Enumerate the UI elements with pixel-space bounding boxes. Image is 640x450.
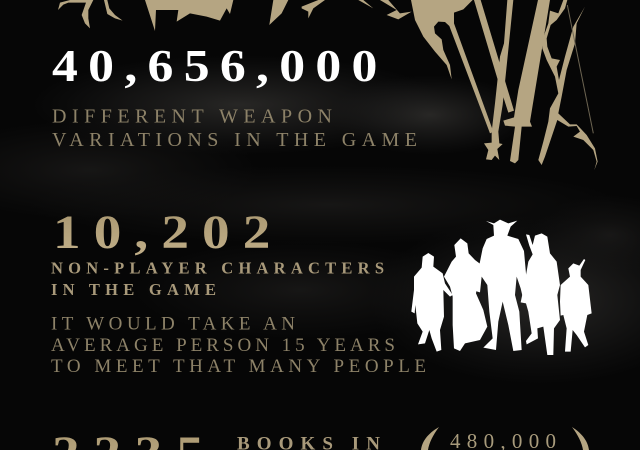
figure: woman in long dress bbox=[444, 238, 487, 351]
stat: weapon variations bbox=[52, 42, 417, 151]
left bracket bbox=[421, 427, 439, 450]
caption: fifteen years to meet them: IT WOULD TAKE AN bbox=[51, 314, 295, 334]
icon: bow string bbox=[567, 5, 593, 133]
heading: non-player characters in the game: NON-PLAYER CHARACTERS bbox=[51, 258, 384, 278]
caption: different weapon variations: DIFFERENT WEAPON bbox=[52, 106, 332, 128]
icon: serrated blade bbox=[538, 0, 598, 170]
heading: non-player characters in the game bbox=[51, 258, 384, 299]
illustration: five white character silhouettes bbox=[411, 220, 592, 355]
icon: mace bbox=[484, 0, 513, 160]
figure: short cloaked woman bbox=[411, 253, 453, 352]
caption: fifteen years to meet them: TO MEET THAT MANY PEOPLE bbox=[51, 356, 426, 377]
number: 40,656,000: 40,656,000 bbox=[52, 42, 377, 91]
figure: hooded figure with sword bbox=[521, 233, 560, 355]
stat: books in game (cropped at bottom) bbox=[52, 427, 589, 450]
icon: broadsword bbox=[503, 0, 550, 163]
stat: non-player characters bbox=[51, 206, 426, 377]
icon: spear bbox=[474, 0, 514, 113]
caption: fifteen years to meet them: AVERAGE PERSON 15 YEARS bbox=[51, 335, 395, 356]
icon: great axe bbox=[411, 0, 493, 133]
figure: stocky dwarf bbox=[560, 259, 592, 352]
caption: different weapon variations bbox=[52, 106, 417, 151]
figure: horned warrior bbox=[475, 220, 529, 351]
right bracket bbox=[572, 427, 589, 450]
caption: different weapon variations: VARIATIONS IN THE GAME bbox=[52, 129, 417, 151]
illustration: weapon silhouettes bbox=[411, 0, 598, 170]
caption: fifteen years to meet them bbox=[51, 314, 426, 377]
illustration: creature silhouettes at top bbox=[58, 0, 412, 31]
number: 10,202: 10,202 bbox=[53, 206, 270, 259]
heading: non-player characters in the game: IN THE GAME bbox=[51, 280, 216, 299]
